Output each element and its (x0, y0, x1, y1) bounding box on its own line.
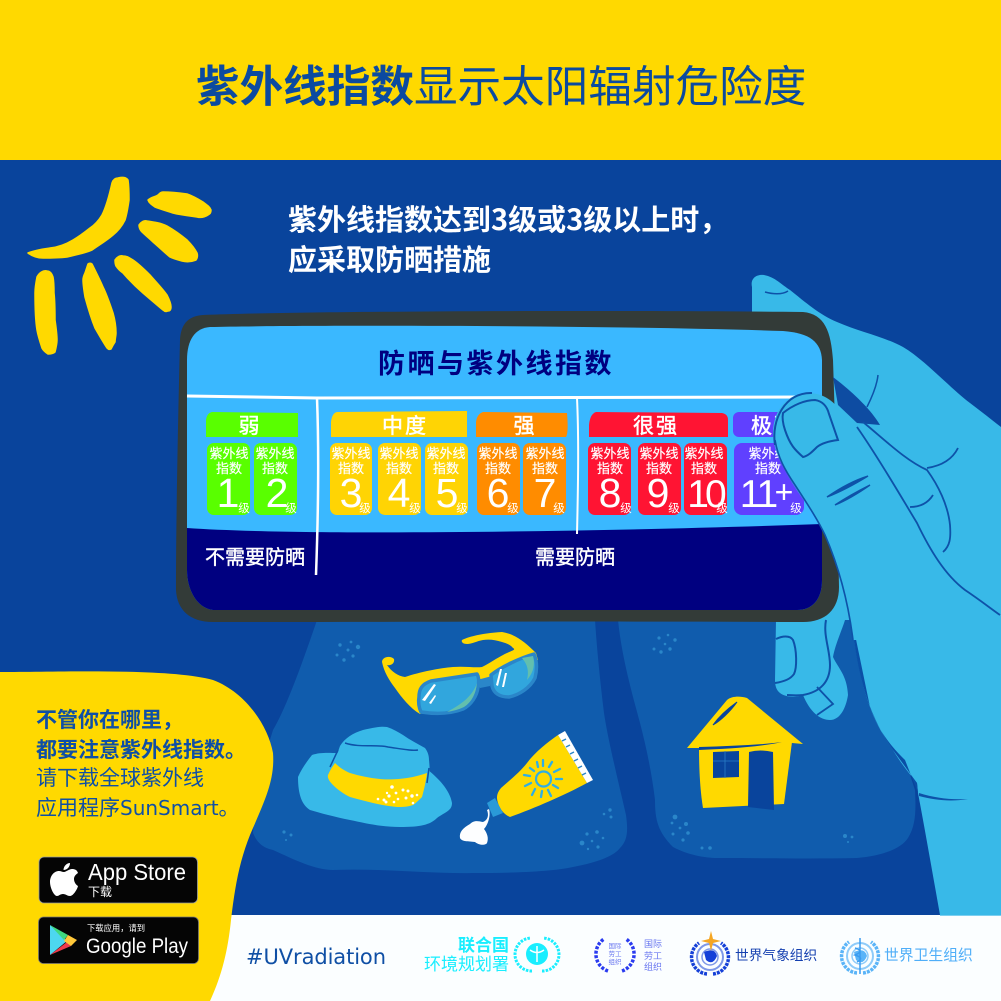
call to action text: 请下载全球紫外线 (36, 762, 204, 792)
card: index 11+ (734, 443, 804, 516)
category: 弱 (206, 410, 298, 440)
card: index 8: 紫外线 (590, 443, 630, 462)
logo: UNEP: 环境规划署 (424, 950, 509, 975)
card: index 11+: 紫外线 (748, 443, 788, 462)
card: index 9: 9 (647, 470, 669, 516)
subtitle: 紫外线指数达到3级或3级以上时， (288, 197, 728, 239)
card: index 4: 指数 (386, 458, 412, 477)
card: index 10: 10 (687, 473, 726, 516)
category: 很强 (589, 410, 728, 440)
thumb over phone (773, 377, 880, 640)
phone screen (187, 326, 822, 610)
category: 中度: 中度 (382, 410, 428, 440)
logo: ILO: 组织 (608, 956, 622, 966)
panel: light patch right (618, 620, 915, 858)
card: index 11+: + (775, 474, 793, 510)
card: index 1 (207, 443, 250, 516)
icon: apple (50, 863, 78, 896)
card: index 5: 级 (456, 500, 468, 516)
card: index 8: 指数 (597, 458, 623, 477)
category: 很强: 很强 (633, 410, 679, 440)
card: index 10: 级 (716, 500, 728, 516)
category: 极强 (733, 410, 813, 440)
card: index 7: 级 (553, 500, 565, 516)
card: index 7 (523, 443, 566, 516)
card: index 9: 级 (668, 500, 680, 516)
card: index 9: 紫外线 (639, 443, 679, 462)
divider lines (187, 396, 805, 398)
card: index 4: 级 (409, 500, 421, 516)
card: index 10: 紫外线 (684, 443, 724, 462)
card: index 3: 级 (359, 500, 371, 516)
logo: UNEP (424, 931, 559, 975)
subtitle: 应采取防晒措施 (288, 237, 491, 279)
badge: google play: 下载应用，请到 (87, 922, 145, 934)
logo: WHO (842, 938, 973, 974)
card: index 7: 7 (534, 470, 556, 516)
logo: UNEP: 联合国 (458, 931, 509, 956)
badge: google play (38, 917, 198, 964)
severity footer band (187, 524, 822, 610)
card: index 2: 级 (285, 500, 297, 516)
card: index 2 (254, 443, 297, 516)
card: index 6: 级 (507, 500, 519, 516)
card: index 6: 指数 (485, 458, 511, 477)
panel: yellow call to action (0, 671, 273, 1001)
logo: WMO (692, 931, 817, 974)
hashtag: #UVradiation (246, 945, 386, 969)
badge: app store: App Store (88, 859, 186, 885)
hand behind phone (752, 275, 1001, 915)
category: 强: 强 (514, 410, 534, 440)
category: 强 (476, 410, 568, 440)
logo: ILO: 劳工 (608, 948, 622, 958)
label: no protection: 不需要防晒 (205, 541, 305, 570)
call to action text: 应用程序SunSmart。 (36, 792, 240, 822)
badge: app store: 下载 (88, 883, 112, 900)
card: index 5: 指数 (433, 458, 459, 477)
call to action text: 不管你在哪里， (36, 704, 183, 734)
subtitle (288, 197, 728, 279)
footer band (0, 915, 1001, 1001)
hand cut line at footer (940, 915, 1001, 916)
card: index 4: 4 (388, 470, 410, 516)
card: index 4: 紫外线 (379, 443, 419, 462)
icon: sun rays (28, 177, 211, 354)
card: index 3: 紫外线 (331, 443, 371, 462)
logo: ILO: 国际 (644, 937, 662, 950)
card: index 3: 3 (340, 470, 362, 516)
card: index 5: 5 (436, 470, 458, 516)
badge: app store (39, 857, 198, 903)
card: index 5: 紫外线 (426, 443, 466, 462)
card: index 7: 紫外线 (525, 443, 565, 462)
card: index 6 (477, 443, 520, 516)
card: index 9: 指数 (646, 458, 672, 477)
icon: hat (298, 727, 452, 827)
icon: sunscreen tube (460, 731, 593, 845)
category: 中度 (331, 410, 467, 440)
card: index 1: 级 (238, 500, 250, 516)
card: index 1: 1 (217, 470, 239, 516)
card: index 10 (684, 443, 728, 516)
card: index 8 (588, 443, 632, 516)
category: 极强: 极强 (751, 410, 797, 440)
card: index 8: 级 (620, 500, 632, 516)
icon: play triangle (50, 925, 77, 955)
badge: google play: Google Play (86, 934, 188, 958)
card: index 6: 紫外线 (478, 443, 518, 462)
label: protection required: 需要防晒 (535, 541, 615, 570)
logo: WMO: 世界气象组织 (735, 944, 817, 964)
call to action text: 都要注意紫外线指数。 (36, 734, 246, 764)
card: index 7: 指数 (532, 458, 558, 477)
card: index 2: 2 (266, 470, 288, 516)
card: index 10: 指数 (691, 458, 717, 477)
icon: house (687, 697, 803, 810)
logo: ILO: 组织 (644, 960, 662, 973)
card: index 6: 6 (487, 470, 509, 516)
card: index 9 (638, 443, 681, 516)
card: index 11+: 指数 (755, 458, 781, 477)
call to action text (36, 704, 246, 822)
header banner (0, 0, 1001, 160)
card: index 11+: 级 (790, 500, 802, 516)
card: index 5 (425, 443, 468, 516)
card: index 3: 指数 (338, 458, 364, 477)
icon: sunglasses (382, 632, 538, 714)
category: 弱: 弱 (238, 410, 260, 440)
title: 紫外线指数显示太阳辐射危险度 (196, 51, 806, 115)
logo: WHO: 世界卫生组织 (884, 944, 973, 965)
panel: light patch left (253, 620, 627, 873)
patch speckles (282, 634, 853, 850)
card: index 8: 8 (599, 470, 621, 516)
card: index 2: 紫外线 (255, 443, 295, 462)
card: index 1: 指数 (216, 458, 242, 477)
chart title: 防晒与紫外线指数 (378, 342, 614, 381)
card: index 1: 紫外线 (209, 443, 249, 462)
phone frame (176, 311, 839, 622)
card: index 11+: 11 (740, 473, 777, 516)
card: index 4 (378, 443, 421, 516)
icon: sun on tube (524, 760, 562, 797)
card: index 2: 指数 (262, 458, 288, 477)
logo: ILO (596, 937, 662, 973)
card: index 3 (330, 443, 372, 516)
logo: ILO: 国际 (608, 940, 622, 950)
logo: ILO: 劳工 (644, 949, 662, 962)
hand contour lines (857, 422, 1000, 615)
